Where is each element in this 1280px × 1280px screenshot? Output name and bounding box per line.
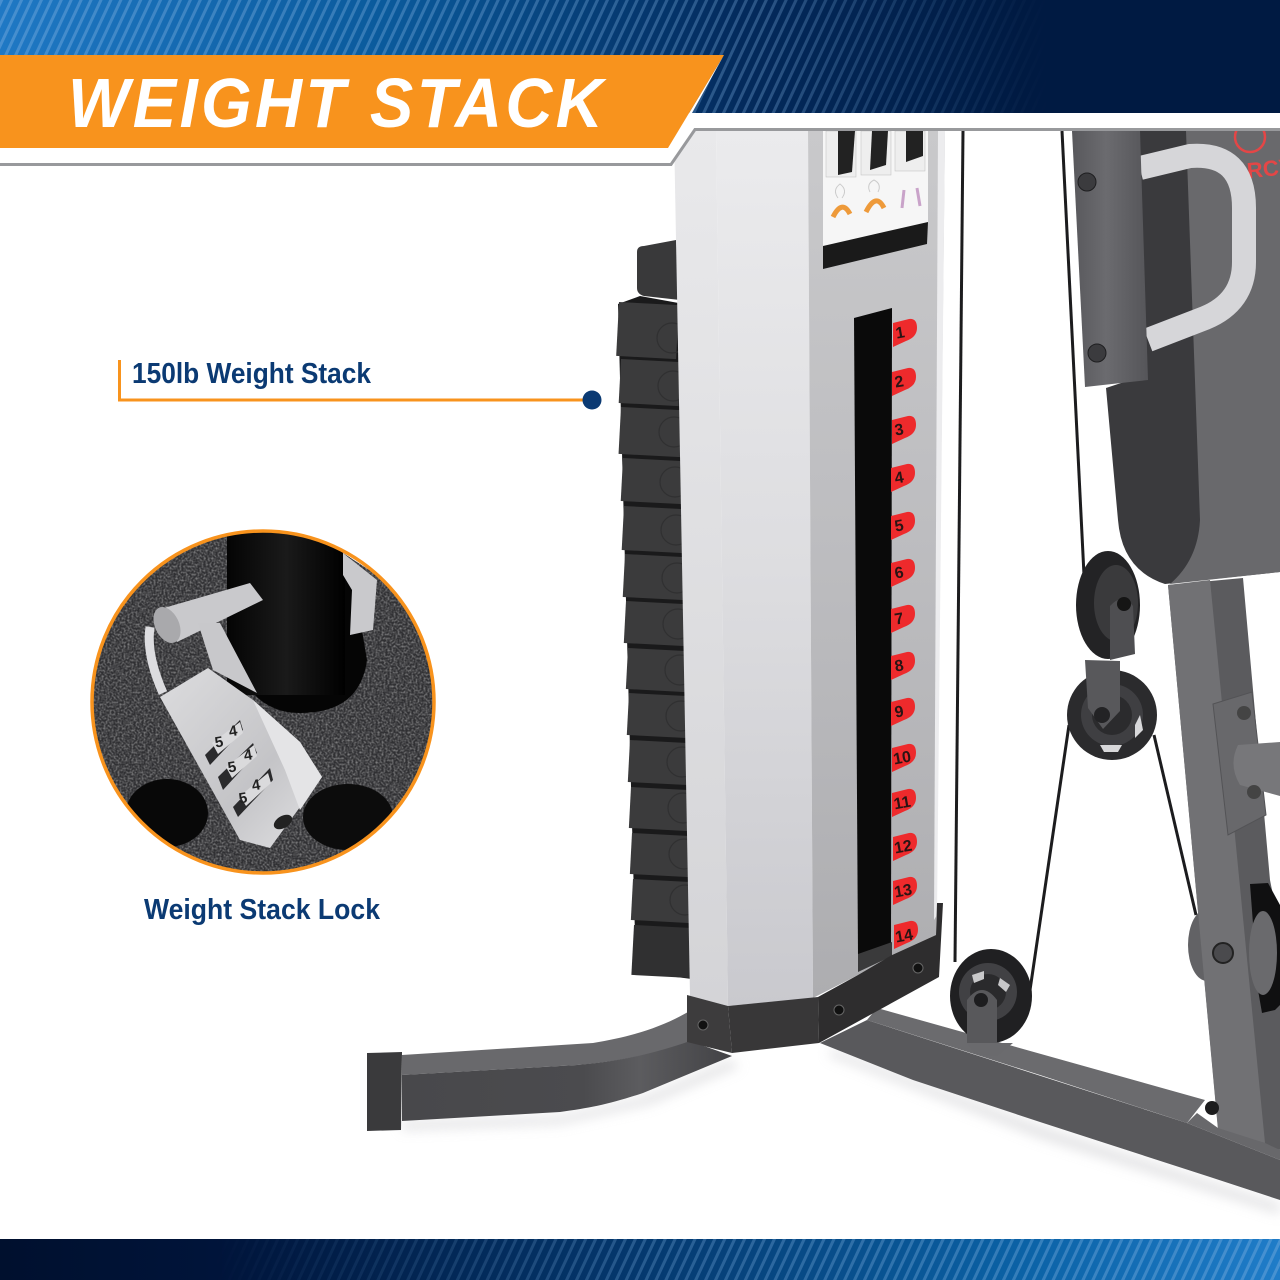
header band <box>0 0 1280 113</box>
base beam <box>820 1008 1280 1200</box>
lock dials: 4 <box>251 776 262 795</box>
lock body <box>160 668 322 848</box>
weight stack plates <box>616 240 700 980</box>
numbered weight tabs <box>891 319 918 949</box>
upright frame <box>1168 578 1280 1160</box>
numbered weight tabs: 6 <box>893 564 905 583</box>
numbered weight tabs: 10 <box>892 749 913 768</box>
numbered weight tabs: 1 <box>894 324 906 343</box>
numbered weight tabs: 13 <box>893 882 914 901</box>
inset: weight stack lock <box>90 530 436 876</box>
weight selector slot <box>854 308 892 956</box>
numbered weight tabs: 9 <box>893 703 905 722</box>
lock dials: 5 <box>238 789 249 808</box>
column left chamfer <box>674 131 728 1006</box>
numbered weight tabs: 5 <box>893 517 905 536</box>
column main face <box>716 131 813 1006</box>
right side pulley disc <box>1188 909 1226 981</box>
title: WEIGHT STACK <box>68 65 607 143</box>
cables <box>955 131 1196 990</box>
callout: 150lb weight stack <box>120 358 602 410</box>
silver handle <box>1140 156 1244 340</box>
white band under header <box>0 55 1280 163</box>
pin hole and post <box>255 554 367 713</box>
grey tube <box>1072 131 1148 387</box>
panel edge highlight <box>934 131 945 920</box>
floor shadows <box>402 1048 1280 1214</box>
lock dials: 4 <box>243 746 254 765</box>
instruction placard <box>823 131 928 269</box>
lock dials <box>205 720 273 817</box>
slot floor <box>858 942 892 972</box>
title banner <box>0 55 724 148</box>
numbered weight tabs: 2 <box>893 373 905 392</box>
column front panel <box>808 131 945 998</box>
column base bracket <box>687 903 943 1053</box>
middle pulley <box>1067 660 1157 760</box>
product photo: gym machine <box>367 122 1280 1214</box>
numbered weight tabs: 14 <box>894 927 915 946</box>
numbered weight tabs: 7 <box>893 610 905 629</box>
caption: weight stack lock: Weight Stack Lock <box>144 894 381 926</box>
upper pulley <box>1076 551 1140 660</box>
callout: 150lb weight stack: 150lb Weight Stack <box>132 358 372 390</box>
lock dials: 4 <box>228 722 239 741</box>
footer band <box>0 1239 1280 1280</box>
numbered weight tabs: 12 <box>893 838 914 857</box>
lower pulley <box>950 949 1032 1056</box>
lock dials: 5 <box>227 758 238 777</box>
lock dials: 5 <box>214 733 225 752</box>
seat back pad <box>1106 122 1280 584</box>
numbered weight tabs: 8 <box>893 657 905 676</box>
numbered weight tabs: 3 <box>893 421 905 440</box>
grey accent line <box>0 130 1280 164</box>
numbered weight tabs: 4 <box>893 469 905 488</box>
lock shackle and pin <box>157 583 263 642</box>
left foot <box>367 1012 732 1131</box>
numbered weight tabs: 11 <box>892 794 912 813</box>
